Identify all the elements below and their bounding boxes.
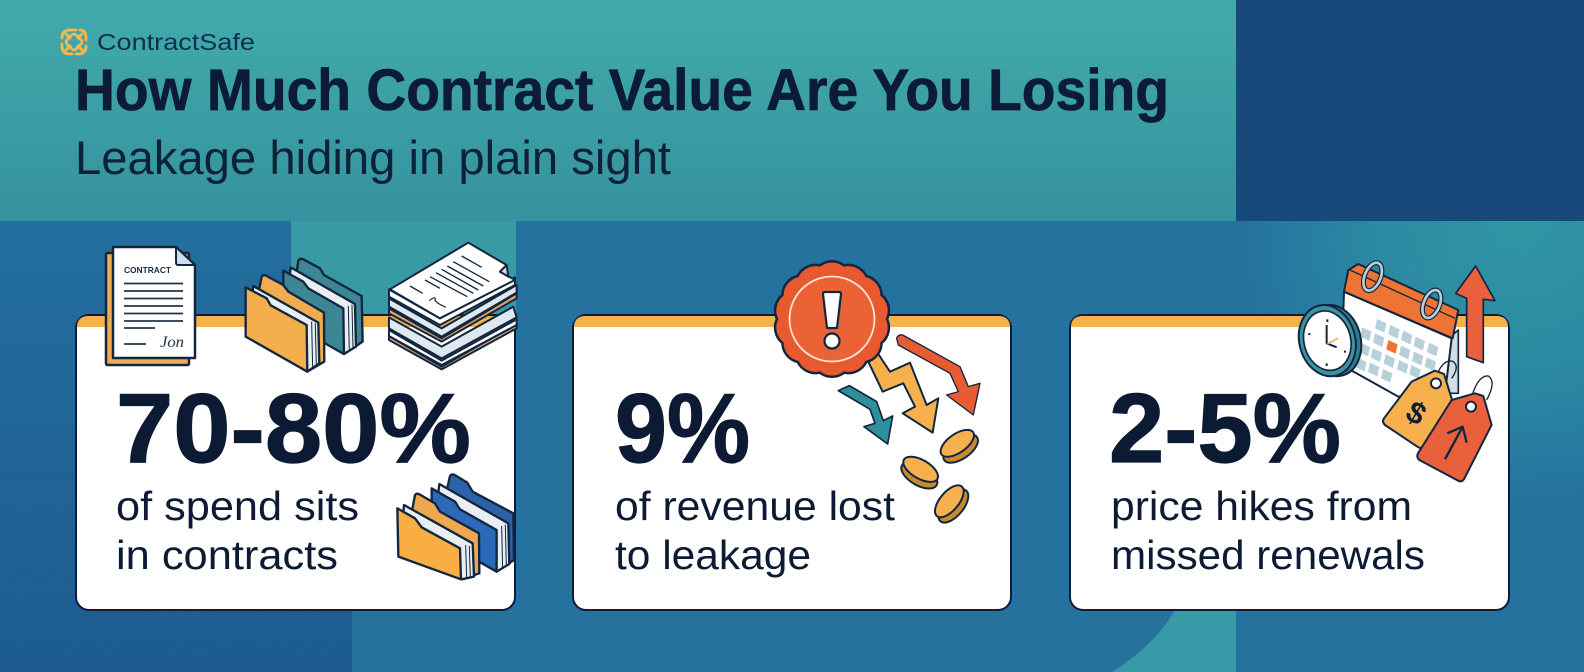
icon: contract document (106, 247, 195, 365)
panel: revenue leakage (573, 315, 1011, 610)
icon: contract document: CONTRACT (124, 265, 172, 275)
label: price hikes from missed renewals: missed renewals (1111, 532, 1425, 578)
label: of revenue lost to leakage: of revenue lost (615, 483, 896, 529)
icon: folders yellow and teal (246, 259, 363, 372)
title: How Much Contract Value Are You Losing (75, 58, 1169, 123)
icon: coins (897, 425, 983, 528)
logo: ContractSafe: ContractSafe (97, 29, 255, 55)
icon: price tags: $ (1400, 394, 1432, 432)
panel: price hikes (1070, 315, 1509, 610)
panel: contracts (76, 315, 515, 610)
icon: paper stack (389, 243, 517, 369)
stat: 2-5%: 2-5% (1109, 373, 1341, 483)
icon: price tags (1383, 361, 1492, 481)
subtitle: Leakage hiding in plain sight (75, 131, 671, 184)
stat: 70-80%: 70-80% (116, 373, 471, 483)
icon: clock (1291, 299, 1369, 382)
logo: ContractSafe (62, 29, 255, 55)
icon: alert badge (775, 261, 889, 377)
icon: contract document: Jon (160, 334, 184, 351)
label: price hikes from missed renewals: price hikes from (1111, 483, 1412, 529)
label: of spend sits in contracts: in contracts (116, 532, 338, 578)
label: of revenue lost to leakage: to leakage (615, 532, 811, 578)
icon: up arrow (1456, 266, 1495, 363)
label: of spend sits in contracts: of spend sits (116, 483, 359, 529)
stat: 9%: 9% (615, 373, 750, 483)
icon: calendar (1342, 260, 1458, 397)
icon: falling arrows (838, 335, 980, 444)
icon: folders yellow and blue (397, 474, 514, 579)
